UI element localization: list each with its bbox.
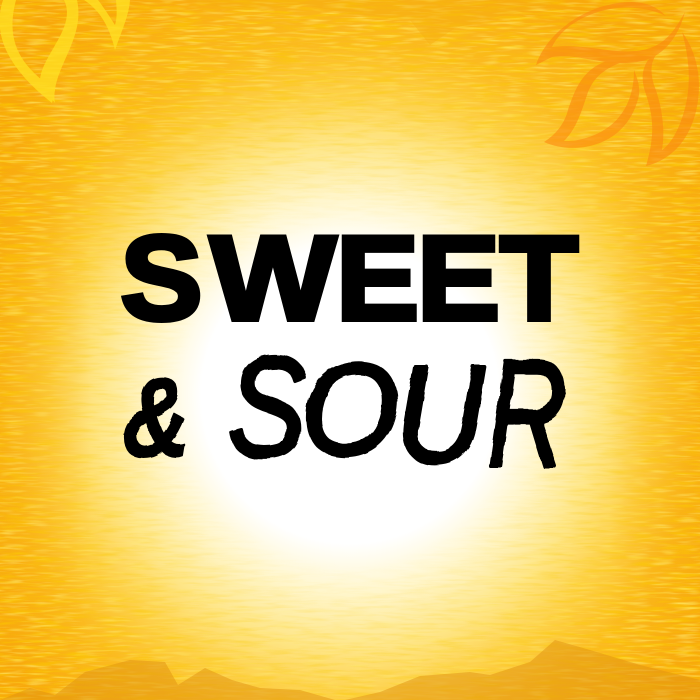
letter U: U	[396, 338, 485, 492]
torn paper band: top	[180, 0, 560, 45]
title: SWEET: W	[210, 212, 337, 346]
letter O: O	[301, 336, 399, 482]
title: SWEET: E	[336, 212, 419, 346]
letter S: S	[228, 328, 306, 487]
torn paper band: bottom	[0, 640, 700, 700]
title: SWEET: S	[120, 212, 202, 346]
subtitle: & SOUR brush lettering	[122, 328, 567, 499]
icon: orange leaves, top right	[536, 2, 699, 166]
title: SWEET	[120, 212, 578, 346]
letter R: R	[487, 329, 567, 499]
title: SWEET: E	[417, 212, 500, 346]
title: SWEET: T	[500, 212, 578, 346]
ampersand: &	[122, 355, 190, 480]
icon: yellow leaves, top left	[0, 0, 130, 103]
